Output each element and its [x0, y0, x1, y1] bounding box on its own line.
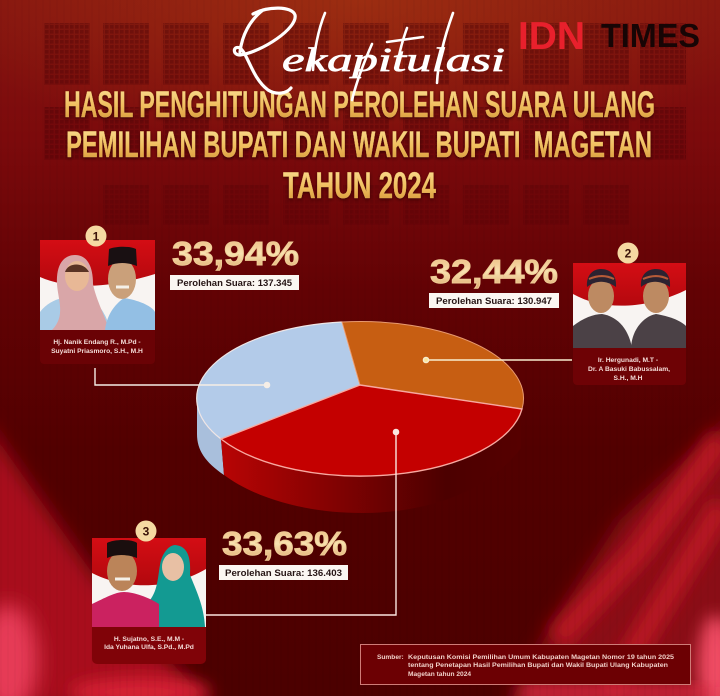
badge 2: 2 [625, 246, 632, 260]
candidate 3 name: H. Sujatno, S.E., M.M - [114, 636, 184, 643]
photo: man in black peci [105, 247, 155, 330]
pie side: blue [197, 398, 224, 475]
logo: IDN Times: IDN [518, 15, 585, 58]
logo: IDN Times [518, 15, 700, 58]
result: candidate 3: Perolehan Suara: 136.403 [225, 568, 342, 579]
badge 1: 1 [93, 230, 100, 244]
pie side: red [221, 406, 521, 513]
card: candidate 3 [92, 538, 206, 664]
badge 3: 3 [143, 524, 150, 538]
candidate 1 name: Suyatni Priasmoro, S.H., M.H [51, 348, 143, 355]
candidate 3 name [104, 636, 194, 651]
card: candidate 1 [40, 240, 155, 364]
slice: candidate 2 orange [342, 322, 524, 409]
candidate 3 name: Ida Yuhana Ulfa, S.Pd., M.Pd [104, 644, 194, 651]
result: candidate 1 [170, 235, 299, 290]
photo: woman in pink hijab [40, 255, 110, 330]
result: candidate 2: 32,44% [430, 253, 558, 290]
candidate 2 name: Dr. A Basuki Babussalam, [588, 366, 670, 373]
slice: candidate 3 red [221, 385, 522, 476]
script title [234, 8, 505, 100]
result: candidate 1: 33,94% [172, 235, 299, 272]
heading: TAHUN 2024 [283, 165, 436, 206]
pie chart [197, 322, 524, 513]
badge 1 [86, 226, 106, 246]
photo: man in black peci and pink shirt [92, 540, 159, 627]
source box: Keputusan Komisi Pemilihan Umum Kabupaten Magetan Nomor 19 tahun 2025 [408, 654, 674, 661]
candidate 1 name: Hj. Nanik Endang R., M.Pd - [53, 339, 141, 346]
result: candidate 3: 33,63% [222, 525, 347, 562]
badge 3 [136, 520, 156, 542]
connector: candidate 3 [206, 429, 399, 615]
photo: man right in batik [631, 269, 686, 348]
source box: Magetan tahun 2024 [408, 671, 471, 678]
badge 2 [618, 242, 638, 264]
photo: man left in batik [573, 269, 632, 348]
result: candidate 3 [219, 525, 348, 580]
heading [64, 84, 655, 206]
result: candidate 1: Perolehan Suara: 137.345 [177, 278, 293, 289]
source box [360, 644, 690, 684]
candidate 2 name: S.H., M.H [614, 375, 643, 382]
candidate 2 name: Ir. Hergunadi, M.T - [598, 357, 658, 364]
source box: tentang Penetapan Hasil Pemilihan Bupati dan Wakil Bupati Ulang Kabupaten [408, 662, 668, 669]
script title: ekapitulasi [282, 42, 505, 79]
connector: candidate 1 [95, 368, 270, 388]
slice: candidate 1 blue [197, 322, 360, 439]
connector: candidate 2 [423, 357, 572, 363]
logo: IDN Times: TIMES [601, 17, 700, 54]
result: candidate 2: Perolehan Suara: 130.947 [436, 296, 552, 307]
source box: Sumber: [377, 654, 404, 661]
photo: woman in teal hijab [150, 545, 205, 627]
candidate 2 name [588, 357, 670, 382]
card: candidate 2 [573, 263, 686, 385]
candidate 1 name [51, 339, 143, 355]
background building window pattern [44, 23, 686, 225]
result: candidate 2 [429, 253, 559, 308]
